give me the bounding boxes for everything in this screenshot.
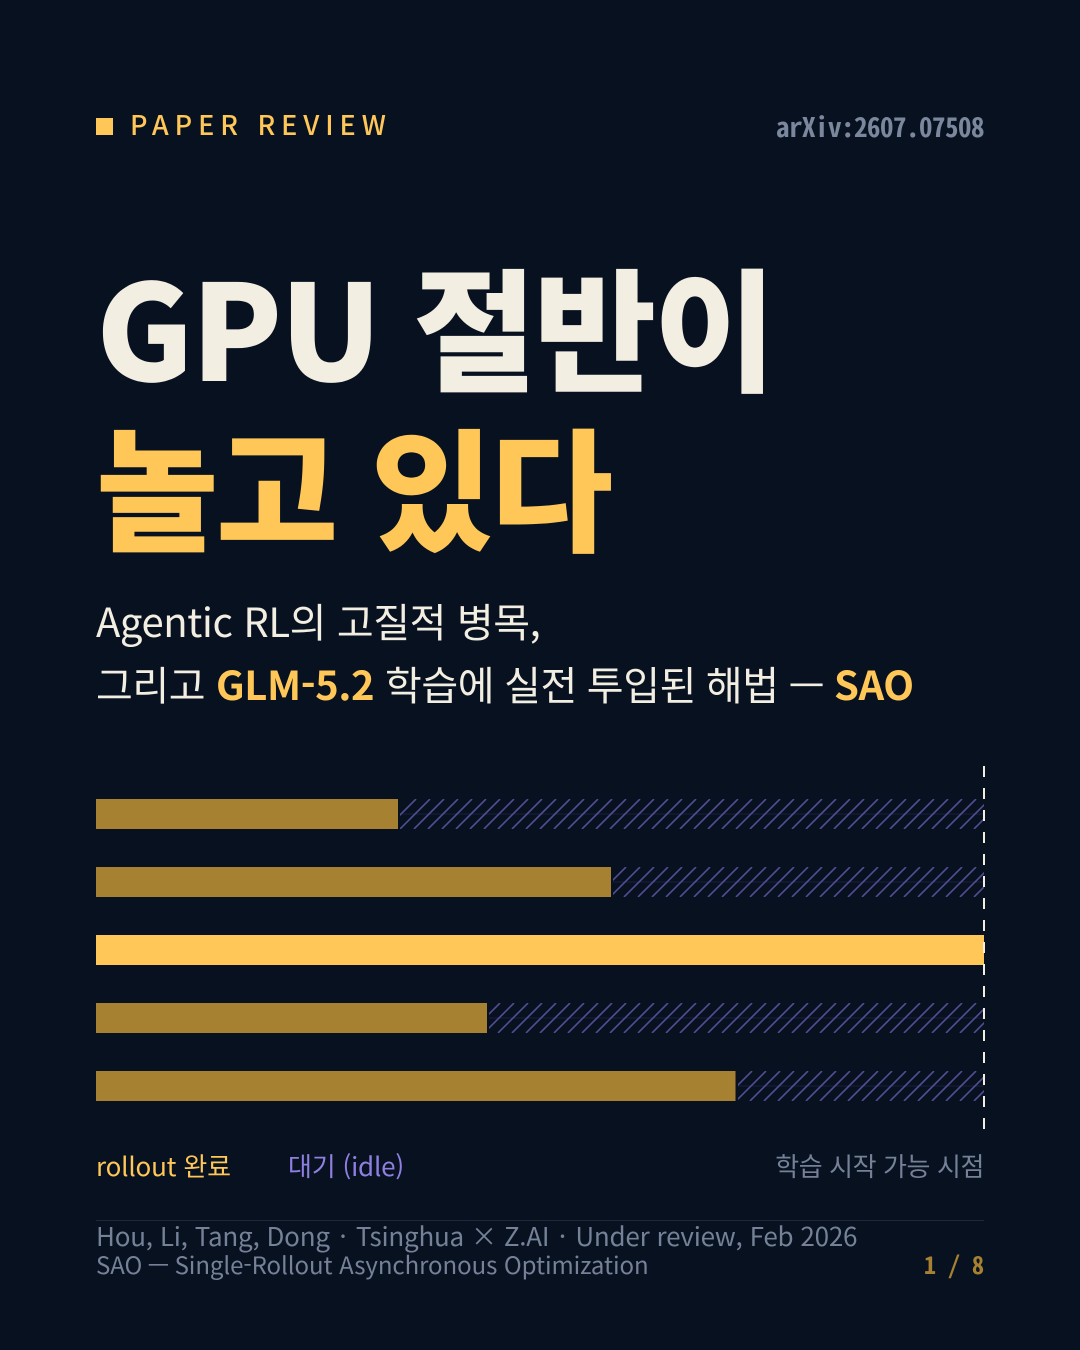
bar 4 — [96, 1003, 1004, 1033]
legend: training start: 학습 시작 가능 시점 — [775, 1147, 984, 1184]
label: PAPER REVIEW: PAPER REVIEW — [130, 104, 392, 143]
subtitle — [96, 591, 914, 712]
footer credits — [96, 1217, 857, 1281]
bar chart: rollouts — [96, 766, 985, 1129]
header: paper review tag — [96, 104, 392, 143]
legend: rollout complete: rollout 완료 — [96, 1147, 231, 1184]
footer line 1: Hou, Li, Tang, Dong · Tsinghua × Z.AI · Under review, Feb 2026 — [96, 1217, 857, 1254]
footer divider — [96, 1220, 984, 1221]
icon: square marker — [96, 118, 113, 135]
bar 3: full — [96, 935, 984, 965]
title line 2: 놀고 있다 — [96, 388, 611, 580]
subtitle line 2: 그리고 GLM-5.2 학습에 실전 투입된 해법 — SAO — [96, 654, 914, 712]
legend: idle: 대기 (idle) — [288, 1147, 404, 1184]
footer line 2: SAO — Single-Rollout Asynchronous Optimization — [96, 1246, 649, 1281]
dashed line: training start point — [983, 766, 985, 1130]
arXiv id: arXiv:2607.07508 — [776, 106, 984, 145]
page number: 1 / 8 — [924, 1246, 984, 1281]
bar 5 — [96, 1071, 1004, 1101]
bar 1 — [96, 799, 1004, 829]
title line 1: GPU 절반이 — [96, 228, 774, 420]
subtitle line 1: Agentic RL의 고질적 병목, — [96, 591, 540, 649]
title — [96, 228, 774, 580]
bar 2 — [96, 867, 1004, 897]
